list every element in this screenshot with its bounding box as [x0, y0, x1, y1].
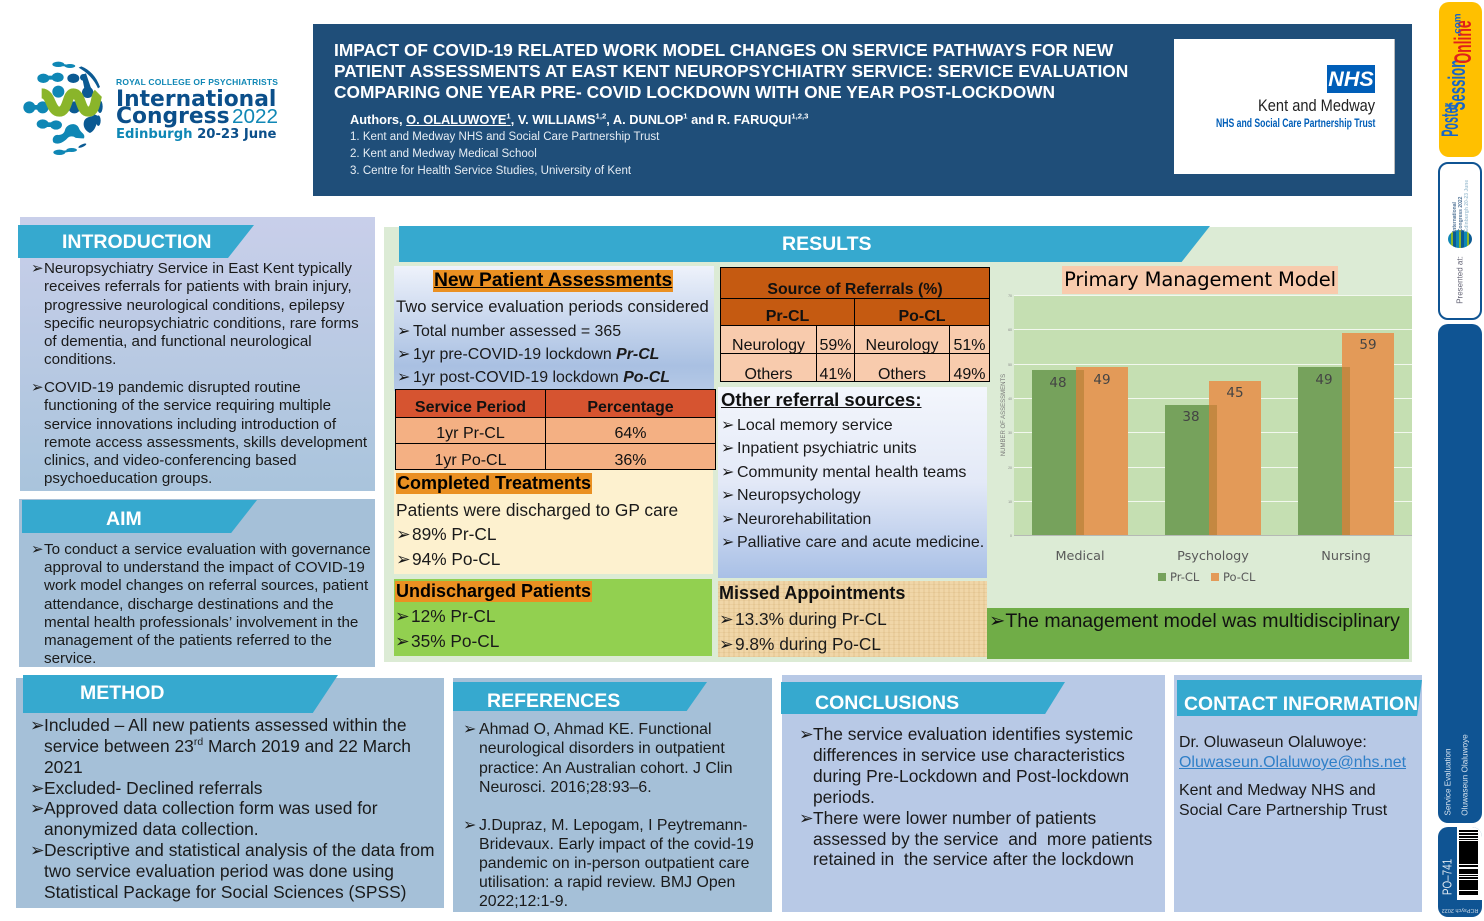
conclusions text: retained in the service after the lockdown: [813, 849, 1134, 869]
aim text: mental health professionals’ involvement in the: [44, 614, 358, 631]
congress logo: 2022: [232, 105, 278, 128]
sidebar: poster session online tab: [1439, 2, 1482, 157]
table: source of referrals: 59%: [819, 337, 852, 354]
method text: 2021: [44, 757, 83, 777]
panel: contact information: Social Care Partnership Trust: [1179, 802, 1387, 819]
heading: conclusions: CONCLUSIONS: [815, 692, 959, 714]
sidebar: poster session online tab: Session: [1444, 60, 1471, 110]
congress logo: ROYAL COLLEGE OF PSYCHIATRISTS: [116, 77, 278, 87]
introduction text: [31, 260, 359, 368]
method text: ➢: [30, 715, 45, 735]
heading: results: [399, 226, 1210, 262]
heading: results: RESULTS: [782, 233, 872, 255]
sidebar: poster session online tab: Poster: [1437, 103, 1464, 137]
y axis ticks: 20: [1008, 466, 1012, 470]
introduction text: of dementia, and functional neurological: [44, 333, 312, 350]
poster title: COMPARING ONE YEAR PRE- COVID LOCKDOWN WITH ONE YEAR POST-LOCKDOWN: [334, 82, 1055, 102]
conclusions text: assessed by the service and more patients: [813, 829, 1152, 849]
panel: references: Bridevaux. Early impact of the covid-19: [479, 836, 754, 853]
panel: undischarged patients: [394, 579, 712, 656]
sidebar: poster id tab: [1438, 827, 1482, 917]
table: service period: 1yr Po-CL: [434, 452, 507, 469]
poster title: PATIENT ASSESSMENTS AT EAST KENT NEUROPSYCHIATRY SERVICE: SERVICE EVALUATION: [334, 61, 1128, 81]
panel: introduction: service innovations including introduction of: [44, 416, 336, 432]
text: ➢: [719, 634, 733, 654]
text: Inpatient psychiatric units: [737, 440, 917, 457]
method text: Descriptive and statistical analysis of the data from: [44, 840, 434, 860]
heading: method: METHOD: [80, 682, 164, 704]
text: ➢: [721, 440, 734, 457]
legend: Po-CL: [1223, 570, 1256, 584]
table: source of referrals: 41%: [819, 366, 852, 383]
text: 12% Pr-CL: [411, 606, 496, 626]
heading: method: [23, 675, 338, 713]
heading: New Patient Assessments: [434, 270, 672, 291]
panel: contact information: [1174, 675, 1422, 912]
table: service period: [395, 389, 716, 470]
text: ➢: [395, 631, 409, 651]
table: source of referrals: Pr-CL: [766, 308, 809, 325]
method text: ➢: [30, 798, 45, 818]
method text: Included – All new patients assessed within the: [44, 715, 407, 735]
table: source of referrals: Po-CL: [898, 308, 946, 325]
legend: Pr-CL: [1170, 570, 1200, 584]
method text: ➢: [30, 840, 45, 860]
text: ➢: [395, 606, 409, 626]
text: ➢: [721, 417, 734, 434]
panel: new patient assessments: 1yr post-COVID-19 lockdown Po-CL: [413, 369, 670, 386]
heading: Undischarged Patients: [396, 581, 591, 601]
panel: aim: [19, 499, 375, 667]
category labels: Psychology: [1177, 549, 1249, 564]
table: source of referrals: [720, 267, 990, 383]
introduction text: Neuropsychiatry Service in East Kent typically: [44, 260, 352, 277]
y axis ticks: 60: [1008, 328, 1012, 332]
NHS logo: NHS: [1328, 67, 1374, 91]
method text: ➢: [30, 778, 45, 798]
table: service period: 36%: [614, 452, 647, 469]
barcode: [1457, 827, 1482, 900]
contact text: [1179, 734, 1406, 771]
method text: two service evaluation period was done using: [44, 861, 394, 881]
NHS logo: NHS and Social Care Partnership Trust: [1216, 116, 1375, 130]
panel: new patient assessments: [394, 266, 714, 391]
y axis ticks: 0: [1010, 534, 1012, 538]
heading: contact information: CONTACT INFORMATION: [1184, 693, 1418, 715]
data labels: 49: [1315, 372, 1333, 388]
table: source of referrals: Neurology: [866, 337, 938, 354]
aim text: approval to understand the impact of COVID-19: [44, 559, 365, 576]
conclusions text: The service evaluation identifies systemic: [813, 724, 1133, 744]
heading: aim: AIM: [106, 508, 142, 530]
contact text: Oluwaseun.Olaluwoye@nhs.net: [1179, 754, 1406, 771]
poster title: IMPACT OF COVID-19 RELATED WORK MODEL CHANGES ON SERVICE PATHWAYS FOR NEW: [334, 40, 1113, 60]
category labels: Medical: [1055, 549, 1105, 564]
panel: references: J.Dupraz, M. Lepogam, I Peytremann-: [479, 817, 748, 834]
bars: psychology: [1165, 381, 1261, 535]
panel: contact information: Kent and Medway NHS and: [1179, 782, 1376, 799]
affiliations: 2. Kent and Medway Medical School: [350, 148, 537, 160]
panel: completed treatments: 94% Po-CL: [412, 549, 500, 569]
introduction text: progressive neurological conditions, epilepsy: [44, 297, 344, 314]
heading: introduction: INTRODUCTION: [62, 231, 212, 253]
text: 9.8% during Po-CL: [735, 634, 881, 654]
heading: contact information: [1177, 680, 1422, 716]
sidebar: presented at tab: Edinburgh 20-23 June: [1464, 180, 1470, 232]
sidebar: presented at tab: International: [1452, 202, 1458, 232]
panel: conclusions: [782, 675, 1165, 912]
references text: [463, 721, 733, 796]
panel: references: pandemic on in-person outpatient care: [479, 855, 749, 872]
aim text: To conduct a service evaluation with governance: [44, 541, 371, 558]
aim text: service.: [44, 650, 96, 667]
method text: Statistical Package for Social Sciences (SPSS): [44, 882, 406, 902]
method text: anonymized data collection.: [44, 819, 259, 839]
text: 35% Po-CL: [411, 631, 499, 651]
references text: Ahmad O, Ahmad KE. Functional: [479, 721, 712, 738]
text: Two service evaluation periods considered: [396, 297, 709, 316]
authors: Authors, O. OLALUWOYE1, V. WILLIAMS1,2, A. DUNLOP1 and R. FARUQUI1,2,3: [350, 112, 808, 127]
sidebar: poster info tab: Oluwaseun Olaluwoye: [1460, 734, 1470, 816]
category labels: Nursing: [1321, 549, 1371, 564]
y axis title: NUMBER OF ASSESSMENTS: [1001, 374, 1007, 456]
header banner: [313, 24, 1412, 196]
table: service period: Percentage: [587, 399, 674, 416]
data labels: 45: [1226, 385, 1244, 401]
data labels: 49: [1093, 372, 1111, 388]
heading: Completed Treatments: [397, 473, 591, 493]
aim text: ➢: [31, 541, 44, 558]
panel: introduction: psychoeducation groups.: [44, 470, 212, 487]
text: 13.3% during Pr-CL: [735, 609, 887, 629]
NHS logo: [1174, 39, 1395, 174]
panel: references: 2022;12:1-9.: [479, 893, 568, 910]
panel: missed appointments: [718, 581, 987, 657]
panel: completed treatments: 89% Pr-CL: [412, 524, 497, 544]
legend: [1158, 570, 1256, 584]
panel: completed treatments: [394, 470, 713, 574]
method text: service between 23rd March 2019 and 22 March: [44, 736, 411, 756]
affiliations: 1. Kent and Medway NHS and Social Care Partnership Trust: [350, 131, 659, 143]
introduction text: specific neuropsychiatric conditions, rare forms: [44, 315, 359, 332]
table: source of referrals: Source of Referrals (%): [767, 281, 943, 298]
sidebar: poster session online tab: .com: [1452, 13, 1464, 37]
table: source of referrals: 49%: [954, 366, 986, 383]
sidebar: poster session online tab: Online: [1450, 20, 1477, 64]
panel: references: [453, 678, 772, 912]
panel: introduction: remote access assessments, skills development: [44, 434, 367, 451]
sidebar: poster id tab: RCPsych 2022: [1442, 907, 1478, 913]
references text: ➢: [463, 721, 476, 738]
y axis ticks: 40: [1008, 397, 1012, 401]
text: Neuropsychology: [737, 487, 861, 504]
table: source of referrals: Others: [744, 366, 792, 383]
panel: introduction: clinics, and video-conferencing based: [44, 452, 296, 469]
aim text: management of the patients referred to the: [44, 632, 332, 649]
sidebar: poster id tab: PO–741: [1440, 859, 1454, 895]
chart plot area: [1014, 295, 1412, 536]
text: ➢: [721, 511, 734, 528]
text: ➢: [721, 534, 734, 551]
panel: references: ➢: [463, 817, 476, 834]
callout: multidisciplinary: ➢The management model was multidisciplinary: [989, 610, 1400, 632]
bars: nursing: [1298, 333, 1394, 535]
heading: references: REFERENCES: [487, 690, 620, 712]
introduction text: ➢: [31, 260, 44, 277]
heading: aim: [22, 500, 257, 533]
panel: method: [16, 678, 444, 908]
text: Local memory service: [737, 417, 893, 434]
congress logo: International: [116, 87, 276, 112]
text: Community mental health teams: [737, 464, 966, 481]
mini logo: [1448, 230, 1472, 248]
references text: neurological disorders in outpatient: [479, 740, 725, 757]
method text: Approved data collection form was used for: [44, 798, 378, 818]
sidebar: poster info tab: Service Evaluation: [1444, 748, 1452, 816]
data labels: 48: [1049, 375, 1067, 391]
data labels: 38: [1182, 409, 1200, 425]
aim text: attendance, discharge destinations and the: [44, 596, 334, 613]
heading: introduction: [18, 225, 254, 258]
heading: Missed Appointments: [719, 583, 905, 603]
y axis ticks: 10: [1008, 500, 1012, 504]
panel: completed treatments: ➢: [396, 524, 410, 544]
congress logo: Congress: [116, 104, 230, 129]
panel: other referral sources: [718, 387, 987, 578]
conclusions text: differences in service use characteristics: [813, 745, 1125, 765]
panel: completed treatments: ➢: [396, 549, 410, 569]
sidebar: presented at tab: Congress 2022: [1458, 197, 1464, 232]
sidebar: presented at tab: Presented at:: [1456, 256, 1464, 304]
bar chart: primary management model: [1000, 266, 1412, 584]
congress logo: Edinburgh 20-23 June: [116, 127, 277, 142]
panel: results: [384, 227, 1412, 662]
introduction text: receives referrals for patients with brain injury,: [44, 278, 352, 295]
aim text: work model changes on referral sources, patient: [44, 577, 368, 594]
conclusions text: ➢: [799, 808, 814, 828]
method text: [30, 715, 434, 902]
table: source of referrals: 51%: [954, 337, 986, 354]
conclusions text: during Pre-Lockdown and Post-lockdown: [813, 766, 1129, 786]
introduction text: conditions.: [44, 351, 116, 368]
congress logo: [23, 62, 278, 155]
poster title: [334, 40, 1128, 102]
affiliations: 3. Centre for Health Service Studies, University of Kent: [350, 165, 631, 177]
heading: Other referral sources:: [721, 389, 922, 410]
panel: introduction: functioning of the service requiring multiple: [44, 397, 331, 414]
text: ➢: [721, 487, 734, 504]
y axis ticks: 70: [1008, 294, 1012, 298]
text: Patients were discharged to GP care: [396, 500, 678, 520]
table: service period: Service Period: [415, 399, 526, 416]
panel: references: utilisation: a rapid review. BMJ Open: [479, 874, 735, 891]
text: [721, 417, 984, 551]
method text: Excluded- Declined referrals: [44, 778, 262, 798]
y axis ticks: 30: [1008, 431, 1012, 435]
y axis ticks: [1008, 294, 1012, 538]
table: source of referrals: Neurology: [732, 337, 805, 354]
y axis ticks: 50: [1008, 363, 1012, 367]
conclusions text: ➢: [799, 724, 814, 744]
panel: introduction: ➢: [31, 379, 44, 396]
references text: practice: An Australian cohort. J Clin: [479, 760, 733, 777]
table: source of referrals: Others: [878, 366, 926, 383]
references text: Neurosci. 2016;28:93–6.: [479, 779, 652, 796]
text: ➢: [719, 609, 733, 629]
callout: multidisciplinary: [987, 608, 1409, 659]
NHS logo: Kent and Medway: [1258, 96, 1375, 115]
table: service period: 64%: [614, 424, 647, 442]
bars: medical: [1032, 367, 1128, 535]
contact text: Dr. Oluwaseun Olaluwoye:: [1179, 734, 1367, 751]
sidebar: poster info tab: [1438, 324, 1482, 823]
conclusions text: There were lower number of patients: [813, 808, 1096, 828]
text: ➢: [721, 464, 734, 481]
conclusions text: periods.: [813, 787, 875, 807]
affiliations: [350, 131, 660, 177]
text: [395, 606, 499, 651]
panel: introduction: [20, 217, 375, 491]
panel: new patient assessments: ➢: [397, 369, 410, 386]
panel: new patient assessments: ➢: [397, 323, 410, 340]
heading: references: [453, 682, 707, 711]
text: Palliative care and acute medicine.: [737, 534, 984, 551]
data labels: 59: [1359, 337, 1377, 353]
category labels: [1055, 549, 1371, 564]
table: service period: 1yr Pr-CL: [436, 424, 505, 442]
text: [719, 609, 887, 654]
heading: conclusions: [781, 682, 1065, 714]
sidebar: presented at tab: [1438, 162, 1482, 320]
text: Neurorehabilitation: [737, 511, 871, 528]
aim text: [31, 541, 371, 667]
panel: new patient assessments: ➢: [397, 346, 410, 363]
panel: new patient assessments: 1yr pre-COVID-19 lockdown Pr-CL: [413, 346, 659, 363]
panel: introduction: COVID-19 pandemic disrupted routine: [44, 379, 301, 396]
conclusions text: [799, 724, 1152, 869]
data labels: [1049, 337, 1377, 425]
chart title: Primary Management Model: [1064, 268, 1336, 291]
panel: new patient assessments: Total number assessed = 365: [413, 323, 621, 340]
